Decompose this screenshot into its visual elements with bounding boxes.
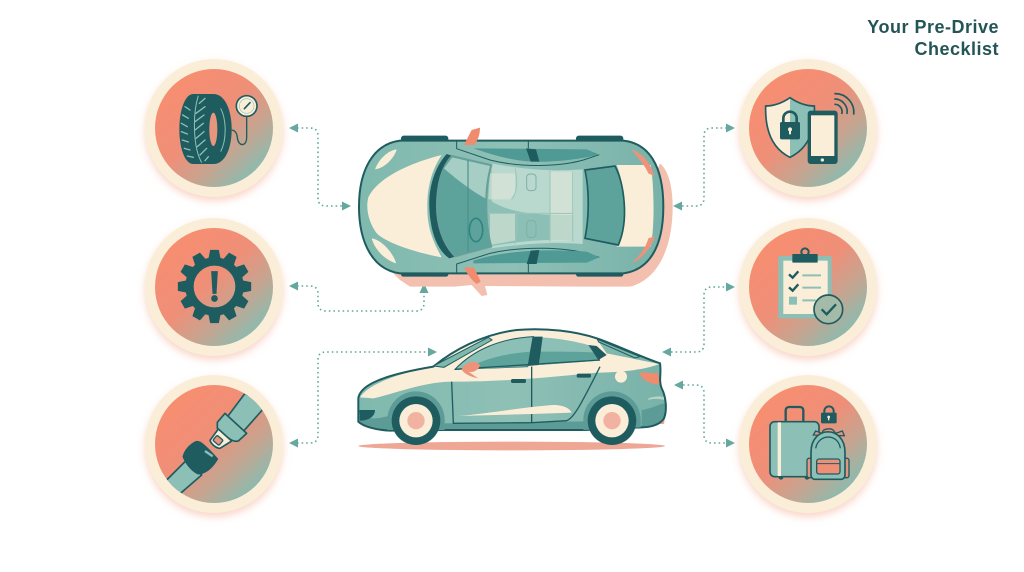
side-view car [358, 329, 666, 450]
connector: checklist to side car [662, 282, 735, 356]
badge: clipboard checklist [739, 218, 877, 360]
connector: luggage to side car [674, 380, 735, 448]
badge: luggage [739, 375, 877, 517]
icon: shield, lock and phone [766, 94, 854, 164]
icon: seat belt buckle [166, 393, 263, 494]
badge: security and phone [739, 59, 877, 201]
title line 2: Checklist [914, 39, 999, 59]
top-view car [359, 128, 673, 296]
connector: warning gear to top car [289, 282, 428, 311]
icon: tyre and gauge [179, 94, 257, 164]
icon: gear with exclamation mark [178, 250, 251, 323]
connector: security to top car [673, 124, 735, 210]
connector: tyres to top car [289, 124, 351, 210]
badge: seat belt [145, 375, 283, 517]
icon: suitcase, backpack and lock [770, 406, 849, 480]
badge: warning gear [145, 218, 283, 360]
title: Your Pre-Drive [867, 17, 999, 37]
icon: clipboard [778, 248, 843, 324]
connector: seat belt to side car [289, 348, 437, 448]
badge: tyre pressure [145, 59, 283, 201]
